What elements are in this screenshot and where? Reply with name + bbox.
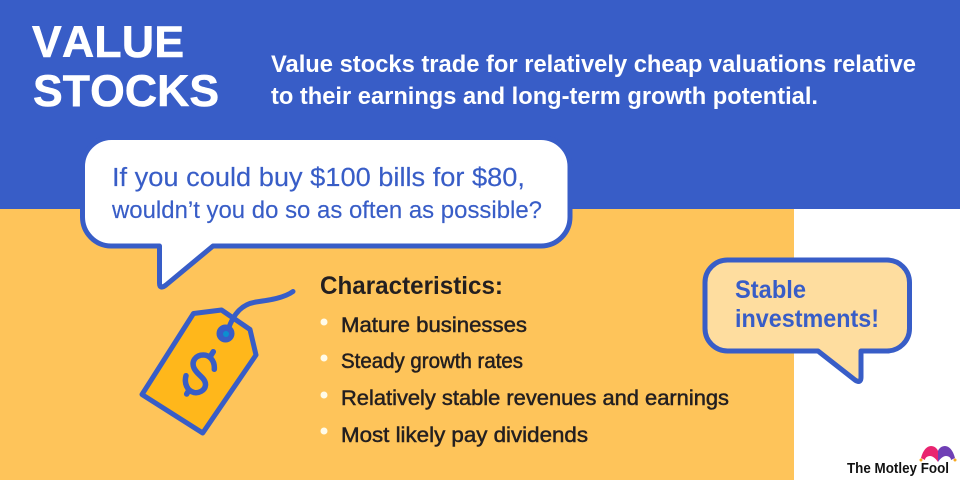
header description: Value stocks trade for relatively cheap valuations relative (271, 51, 916, 78)
title: VALUE (32, 18, 184, 67)
title (32, 18, 219, 116)
list: characteristics: Steady growth rates (341, 350, 523, 373)
logo: The Motley Fool (847, 446, 956, 477)
list: characteristics: Mature businesses (341, 314, 527, 337)
list: characteristics (320, 314, 729, 447)
header description (271, 51, 916, 110)
icon: price tag (142, 292, 293, 433)
title: STOCKS (33, 67, 219, 116)
callout: stable investments speech bubble (705, 260, 910, 381)
logo: The Motley Fool: The Motley Fool (847, 461, 949, 477)
callout: question speech bubble: wouldn’t you do so as often as possible? (111, 197, 542, 224)
callout: question speech bubble: If you could buy $100 bills for $80, (112, 164, 525, 192)
list: characteristics: Most likely pay dividends (341, 424, 588, 447)
heading: characteristics: Characteristics: (320, 272, 503, 300)
callout: stable investments speech bubble: Stable (735, 276, 806, 304)
header description: to their earnings and long-term growth potential. (271, 83, 818, 110)
panel: blue header (0, 0, 960, 209)
callout: stable investments speech bubble: investments! (735, 305, 879, 333)
list: characteristics: Relatively stable revenues and earnings (341, 387, 729, 410)
panel: yellow section (0, 209, 794, 480)
callout: question speech bubble (82, 138, 570, 287)
